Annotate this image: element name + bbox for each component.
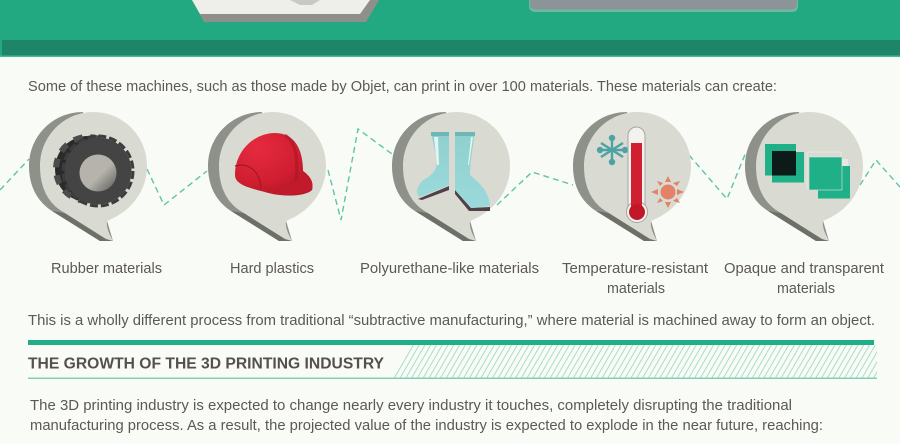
icon: opaque squares [765,144,804,182]
label: opaque and transparent materials: Opaque and transparent [724,260,885,277]
label: rubber materials: Rubber materials [51,260,162,277]
top green band [0,0,900,57]
dashed connector line [0,129,900,220]
icon: tire [55,136,133,206]
icon: snowflake [598,136,627,164]
bubble: temperature-resistant materials [573,112,691,241]
bubble: hard plastics [208,112,326,241]
icon: transparent squares [807,152,850,198]
subtractive manufacturing sentence: This is a wholly different process from traditional “subtractive manufacturing,” where material is machined away to form an object. [28,312,875,329]
icon: rubber boots [417,132,490,211]
bubble: polyurethane-like materials [392,112,510,241]
bubble: opaque and transparent materials [745,112,863,241]
section header: growth of the 3D printing industry: THE GROWTH OF THE 3D PRINTING INDUSTRY [28,356,384,372]
label: opaque and transparent materials [724,260,885,297]
body paragraph: manufacturing process. As a result, the projected value of the industry is expected to explode in the near future, reaching: [30,417,823,434]
label: polyurethane-like materials: Polyurethane-like materials [360,260,539,277]
printer base fragment [192,0,379,22]
printer display panel fragment [529,0,798,12]
label: temperature-resistant materials [562,260,709,297]
section header: growth of the 3D printing industry [28,340,877,379]
label: temperature-resistant materials: Temperature-resistant [562,260,709,277]
body paragraph: The 3D printing industry is expected to change nearly every industry it touches, completely disrupting the traditional [30,397,792,414]
label: opaque and transparent materials: materials [777,280,835,297]
intro text: Some of these machines, such as those made by Objet, can print in over 100 materials. These materials can create: [28,78,777,95]
icon: sun [651,176,684,208]
body paragraph [30,397,823,434]
bubble: rubber materials [29,112,147,241]
label: hard plastics: Hard plastics [230,260,314,277]
icon: red helmet [235,133,313,196]
label: temperature-resistant materials: materials [607,280,665,297]
icon: thermometer [626,127,648,222]
